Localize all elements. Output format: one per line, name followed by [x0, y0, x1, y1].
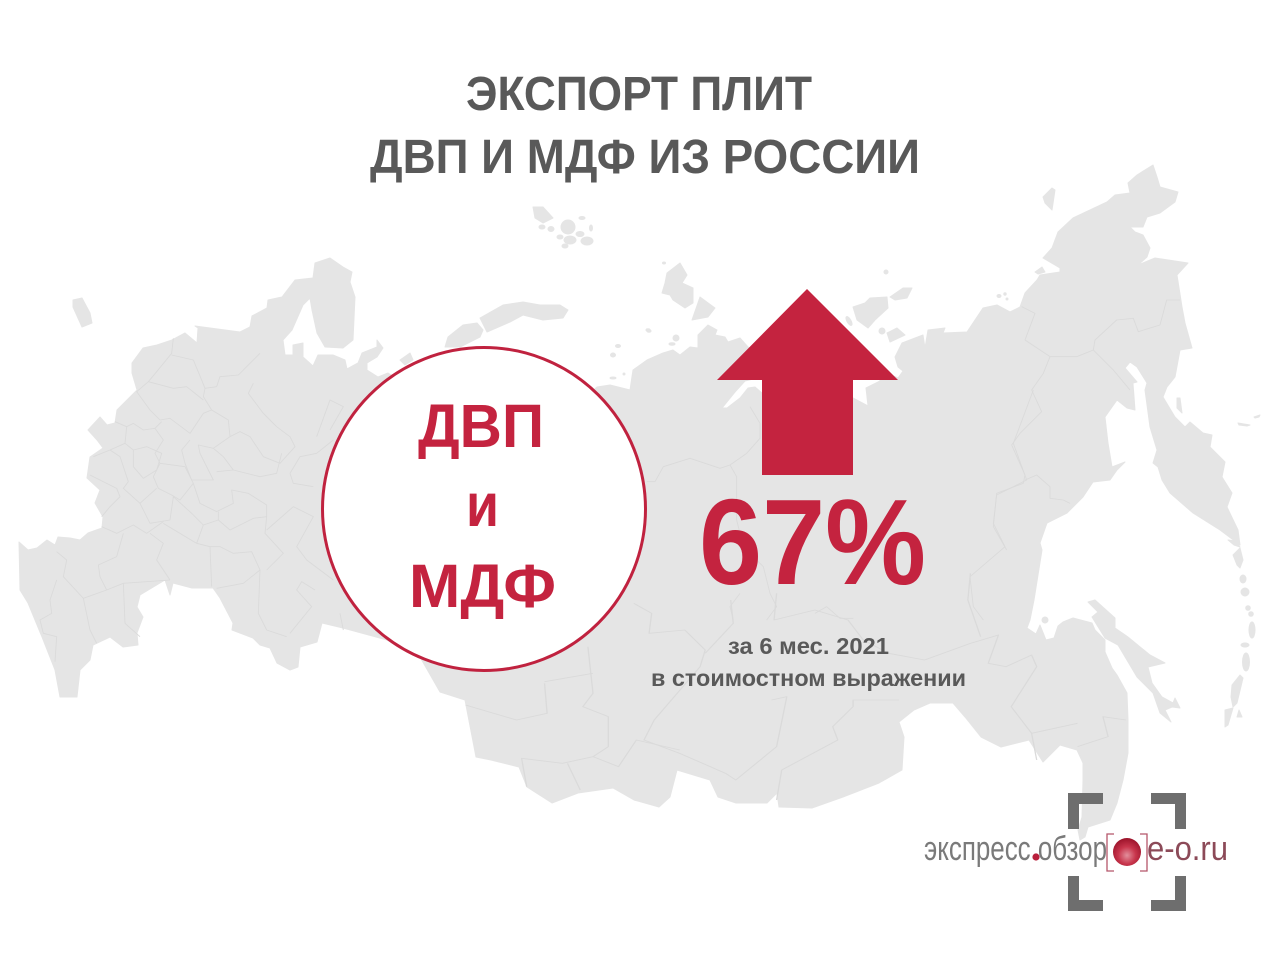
region borders: centre: [647, 390, 1033, 620]
value: 67%: 67%: [699, 474, 926, 610]
product label: ДВП: [418, 392, 544, 460]
islands: [73, 188, 1260, 727]
logo red ball: [1113, 838, 1141, 866]
product label: [409, 392, 556, 620]
logo frame brackets: [1068, 793, 1186, 911]
region borders: south: [466, 573, 1126, 800]
map of Russia: [19, 165, 1260, 840]
logo: [924, 793, 1228, 911]
caption: [651, 633, 966, 691]
title: [370, 68, 920, 184]
product label: МДФ: [409, 552, 556, 620]
logo wordmark right: e-o.ru: [1147, 830, 1228, 868]
arrow up: [717, 289, 898, 475]
caption: за 6 мес. 2021: [728, 633, 889, 659]
region borders: west: [40, 338, 343, 662]
title: ДВП И МДФ ИЗ РОССИИ: [370, 131, 920, 184]
logo wordmark left: экспресс обзор: [924, 830, 1107, 868]
logo lens brackets: [1107, 834, 1147, 871]
product label: и: [466, 471, 499, 539]
region borders: far east: [993, 300, 1180, 550]
caption: в стоимостном выражении: [651, 665, 966, 691]
circle outline: [322, 348, 646, 670]
mainland silhouette: [19, 165, 1240, 840]
circle badge: product: [322, 348, 646, 670]
title: ЭКСПОРТ ПЛИТ: [466, 68, 812, 121]
logo red dot: [1032, 853, 1040, 861]
